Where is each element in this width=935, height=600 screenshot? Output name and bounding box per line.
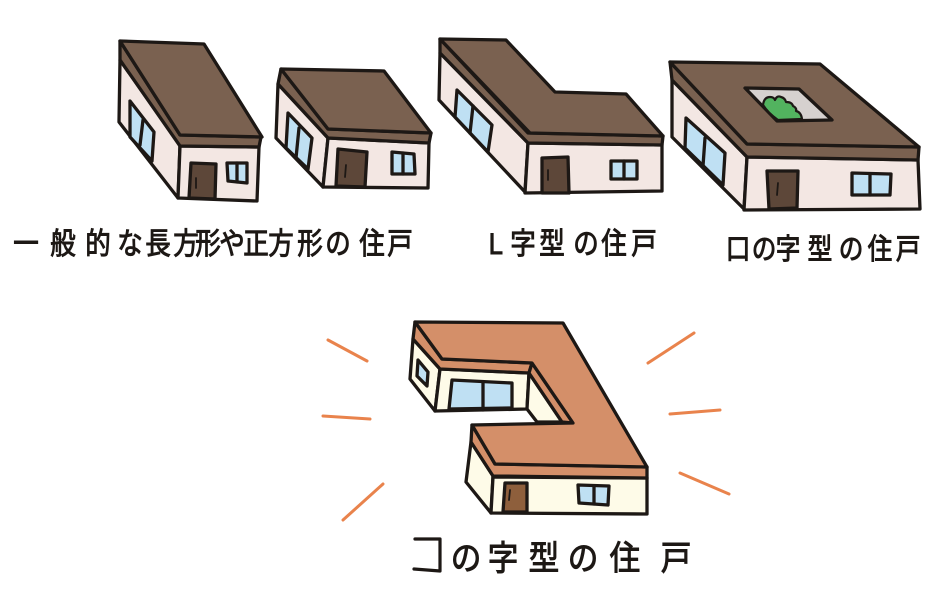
wall: upper front bbox=[435, 369, 529, 411]
wall: front bbox=[744, 157, 920, 210]
large window bbox=[449, 380, 512, 410]
wall: front bbox=[178, 146, 259, 201]
fascia: lower wing bbox=[471, 425, 647, 478]
courtyard opening bbox=[745, 88, 832, 121]
wall: left side bbox=[439, 53, 528, 192]
door bbox=[542, 157, 569, 193]
roof bbox=[440, 39, 663, 136]
door bbox=[336, 149, 367, 187]
roof bbox=[281, 69, 431, 133]
caption: general rectangle and square units: 一般的な長方形や正方形の住戸 bbox=[13, 227, 413, 260]
front window bbox=[611, 161, 637, 179]
reversed U character stroke bbox=[414, 539, 440, 571]
wall: left side bbox=[119, 60, 180, 198]
house: long rectangular unit bbox=[119, 41, 262, 201]
highlighted house: U-shaped unit bbox=[410, 322, 647, 514]
house: square unit bbox=[276, 69, 431, 188]
wall: upper left side bbox=[410, 339, 440, 411]
fascia: upper wing bbox=[413, 322, 532, 373]
house: L-shaped unit bbox=[439, 39, 663, 193]
caption: courtyard unit: 口の字型の住戸 bbox=[726, 233, 920, 265]
front window bbox=[392, 152, 415, 174]
fascia bbox=[278, 69, 431, 143]
caption: L-shaped unit: L字型の住戸 bbox=[489, 227, 657, 260]
wall: lower left side bbox=[466, 442, 493, 513]
roof bbox=[120, 41, 262, 137]
door bbox=[767, 171, 798, 209]
wall: lower front bbox=[491, 477, 647, 514]
wall: inner side bbox=[527, 373, 562, 422]
side window bbox=[286, 113, 312, 169]
side window bbox=[455, 90, 492, 152]
fascia bbox=[440, 39, 663, 145]
side window bbox=[130, 101, 154, 161]
door bbox=[503, 483, 527, 512]
fascia bbox=[670, 62, 919, 160]
roof bbox=[670, 62, 919, 147]
house: courtyard unit bbox=[670, 62, 920, 210]
caption: U-shaped unit bbox=[414, 539, 691, 577]
wall: front bbox=[323, 138, 429, 188]
caption text: の字型の住戸 bbox=[451, 540, 691, 577]
wall: front bbox=[525, 143, 662, 193]
side window bbox=[685, 118, 725, 185]
roof bbox=[415, 322, 647, 467]
wall: left side bbox=[672, 80, 747, 209]
wall: left side bbox=[276, 84, 328, 187]
door bbox=[189, 163, 216, 199]
front window bbox=[578, 485, 609, 505]
emphasis rays bbox=[323, 333, 729, 520]
front window bbox=[227, 163, 247, 183]
fascia bbox=[120, 41, 261, 147]
courtyard bush bbox=[763, 96, 802, 120]
fascia: inner bbox=[529, 363, 573, 423]
front window bbox=[852, 173, 891, 195]
small side window bbox=[417, 360, 428, 386]
